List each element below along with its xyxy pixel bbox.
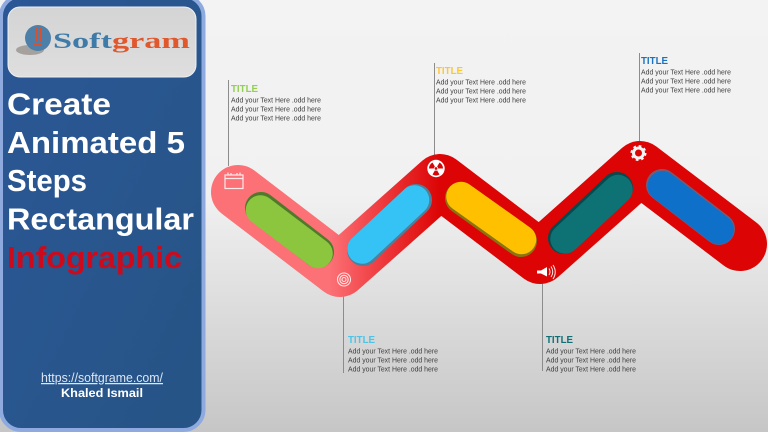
step 4 text: TITLE	[546, 334, 573, 346]
step 4 text: Add your Text Here .odd here	[546, 348, 636, 356]
pill: teal	[564, 188, 618, 239]
step 1 text: TITLE	[231, 83, 258, 95]
step 5 text: TITLE	[641, 55, 668, 67]
step 4 text: Add your Text Here .odd here	[546, 358, 636, 364]
panel: left sidebar	[1, 0, 204, 430]
connector lines	[228, 53, 640, 373]
step 5 text: Add your Text Here .odd here	[641, 78, 731, 86]
step 3 text	[436, 65, 526, 104]
pill: blue	[662, 185, 719, 230]
logo wordmark: Soft gram	[53, 28, 190, 53]
zigzag band	[238, 168, 740, 270]
icon: speaker	[537, 265, 555, 279]
pill: green	[260, 208, 318, 254]
author name: Khaled Ismail	[61, 388, 143, 400]
step 4 text: Add your Text Here .odd here	[546, 366, 636, 374]
sidebar heading: Infographic	[7, 240, 182, 275]
sidebar heading: Animated 5	[7, 125, 185, 160]
step 2 text: Add your Text Here .odd here	[348, 366, 438, 374]
step 4 text	[546, 334, 636, 374]
pill: cyan	[362, 200, 416, 250]
icon: radiation	[427, 160, 445, 177]
step 3 text: Add your Text Here .odd here	[436, 98, 526, 104]
step 1 text: Add your Text Here .odd here	[231, 98, 321, 104]
icon: logo badge	[16, 25, 51, 55]
logo box	[8, 7, 196, 77]
sidebar heading: Steps	[7, 163, 87, 198]
step 3 text: Add your Text Here .odd here	[436, 88, 526, 96]
sidebar heading: Create	[7, 86, 111, 122]
step 2 text: Add your Text Here .odd here	[348, 348, 438, 356]
icon: calendar	[225, 172, 243, 188]
step 5 text: Add your Text Here .odd here	[641, 88, 731, 94]
step 2 text: TITLE	[348, 334, 375, 346]
step 1 text: Add your Text Here .odd here	[231, 106, 321, 114]
step 2 text: Add your Text Here .odd here	[348, 358, 438, 364]
step 5 text	[641, 55, 731, 94]
step 3 text: Add your Text Here .odd here	[436, 80, 526, 86]
step 5 text: Add your Text Here .odd here	[641, 70, 731, 76]
pill: yellow	[461, 196, 522, 241]
step 3 text: TITLE	[436, 65, 463, 77]
step 1 text	[231, 83, 321, 122]
icon: radar target	[338, 273, 350, 286]
icon: gear	[632, 146, 645, 160]
website link: https://softgrame.com/	[41, 371, 164, 385]
sidebar heading	[7, 86, 194, 275]
step 2 text	[348, 334, 438, 374]
step 1 text: Add your Text Here .odd here	[231, 116, 321, 122]
sidebar heading: Rectangular	[7, 202, 194, 236]
